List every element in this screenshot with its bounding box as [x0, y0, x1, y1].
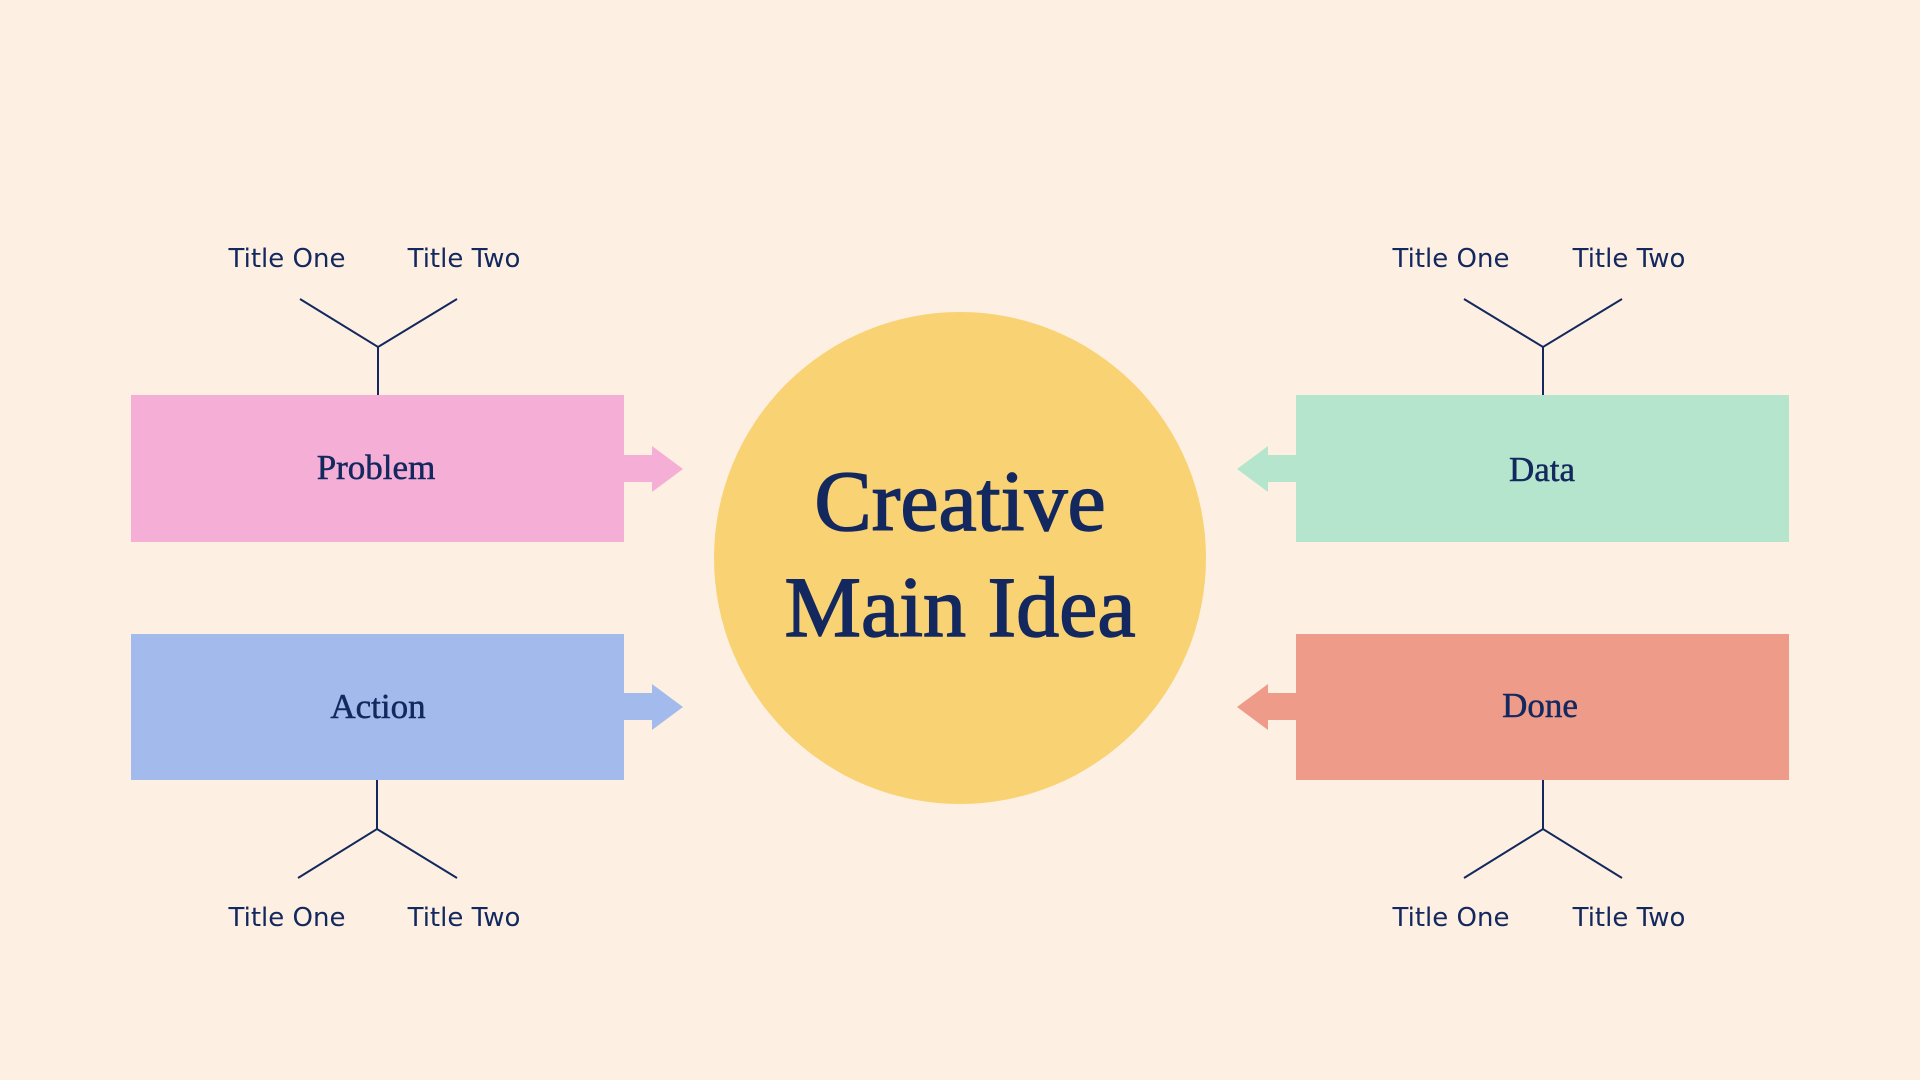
arrow: data to center [1237, 446, 1296, 492]
branch: done titles [1392, 780, 1685, 933]
panel: data: Data [1509, 450, 1575, 489]
branch: done titles: Title Two [1572, 903, 1685, 933]
center circle: main idea: Main Idea [784, 559, 1136, 655]
panel: done [1296, 634, 1789, 780]
branch: data titles: Title One [1392, 244, 1509, 274]
panel: action [131, 634, 624, 780]
branch: problem titles [228, 244, 520, 395]
panel: data [1296, 395, 1789, 542]
arrow: done to center [1237, 684, 1296, 730]
branch: problem titles: Title One [228, 244, 345, 274]
panel: done: Done [1502, 686, 1578, 725]
branch: data titles [1392, 244, 1685, 395]
arrow: action to center [624, 684, 683, 730]
panel: action: Action [330, 687, 426, 726]
panel: problem [131, 395, 624, 542]
center circle: main idea: Creative [814, 453, 1106, 549]
branch: action titles: Title One [228, 903, 345, 933]
branch: done titles: Title One [1392, 903, 1509, 933]
center circle: main idea [714, 312, 1206, 804]
branch: action titles: Title Two [407, 903, 520, 933]
branch: action titles [228, 780, 520, 933]
arrow: problem to center [624, 446, 683, 492]
branch: data titles: Title Two [1572, 244, 1685, 274]
panel: problem: Problem [317, 448, 435, 487]
branch: problem titles: Title Two [407, 244, 520, 274]
